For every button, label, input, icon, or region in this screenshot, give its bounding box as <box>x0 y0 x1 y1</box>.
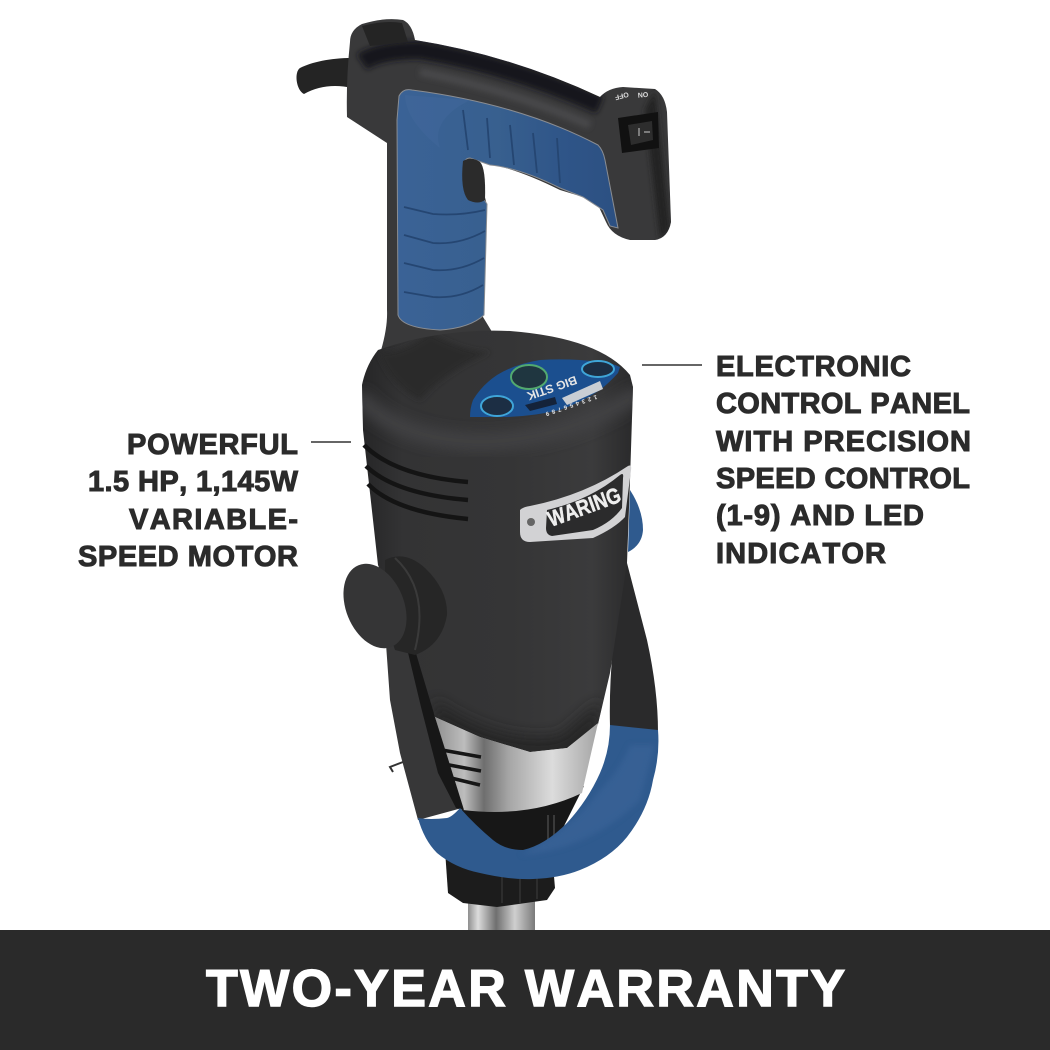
callout: control panel: SPEED CONTROL <box>716 463 970 495</box>
right guard arm <box>610 490 658 732</box>
callout: motor <box>78 429 351 573</box>
callout: motor: POWERFUL <box>127 429 298 461</box>
callout: control panel: CONTROL PANEL <box>716 388 970 420</box>
handle <box>347 19 671 360</box>
left guard arm <box>385 630 464 820</box>
callout: motor: VARIABLE- <box>129 504 298 536</box>
warranty banner <box>0 930 1050 1050</box>
power cord <box>297 58 352 94</box>
callout: motor: SPEED MOTOR <box>78 541 298 573</box>
blender product illustration <box>332 19 671 932</box>
waring badge: WARING <box>544 482 624 532</box>
blue guard <box>418 725 658 879</box>
callout: control panel: INDICATOR <box>716 538 886 570</box>
side knob <box>332 554 447 658</box>
waring badge <box>520 466 631 542</box>
motor body <box>358 331 640 760</box>
callout: motor: 1.5 HP, 1,145W <box>88 466 299 498</box>
stainless collar <box>435 717 598 812</box>
control panel: BIG STIK <box>525 373 579 403</box>
callout: control panel: ELECTRONIC <box>716 351 911 383</box>
blue grip <box>397 90 618 330</box>
warranty banner: TWO-YEAR WARRANTY <box>206 960 845 1018</box>
lower collar and shaft <box>445 786 584 932</box>
rocker switch <box>613 90 659 153</box>
control panel: 123456789 <box>542 393 598 417</box>
vents <box>364 445 468 519</box>
rocker switch: ON <box>637 90 648 98</box>
rocker switch: OFF <box>613 90 629 101</box>
callout: control panel: WITH PRECISION <box>716 426 971 458</box>
control panel <box>470 359 620 417</box>
callout: control panel: (1-9) AND LED <box>716 500 924 532</box>
callout: control panel <box>642 351 971 570</box>
